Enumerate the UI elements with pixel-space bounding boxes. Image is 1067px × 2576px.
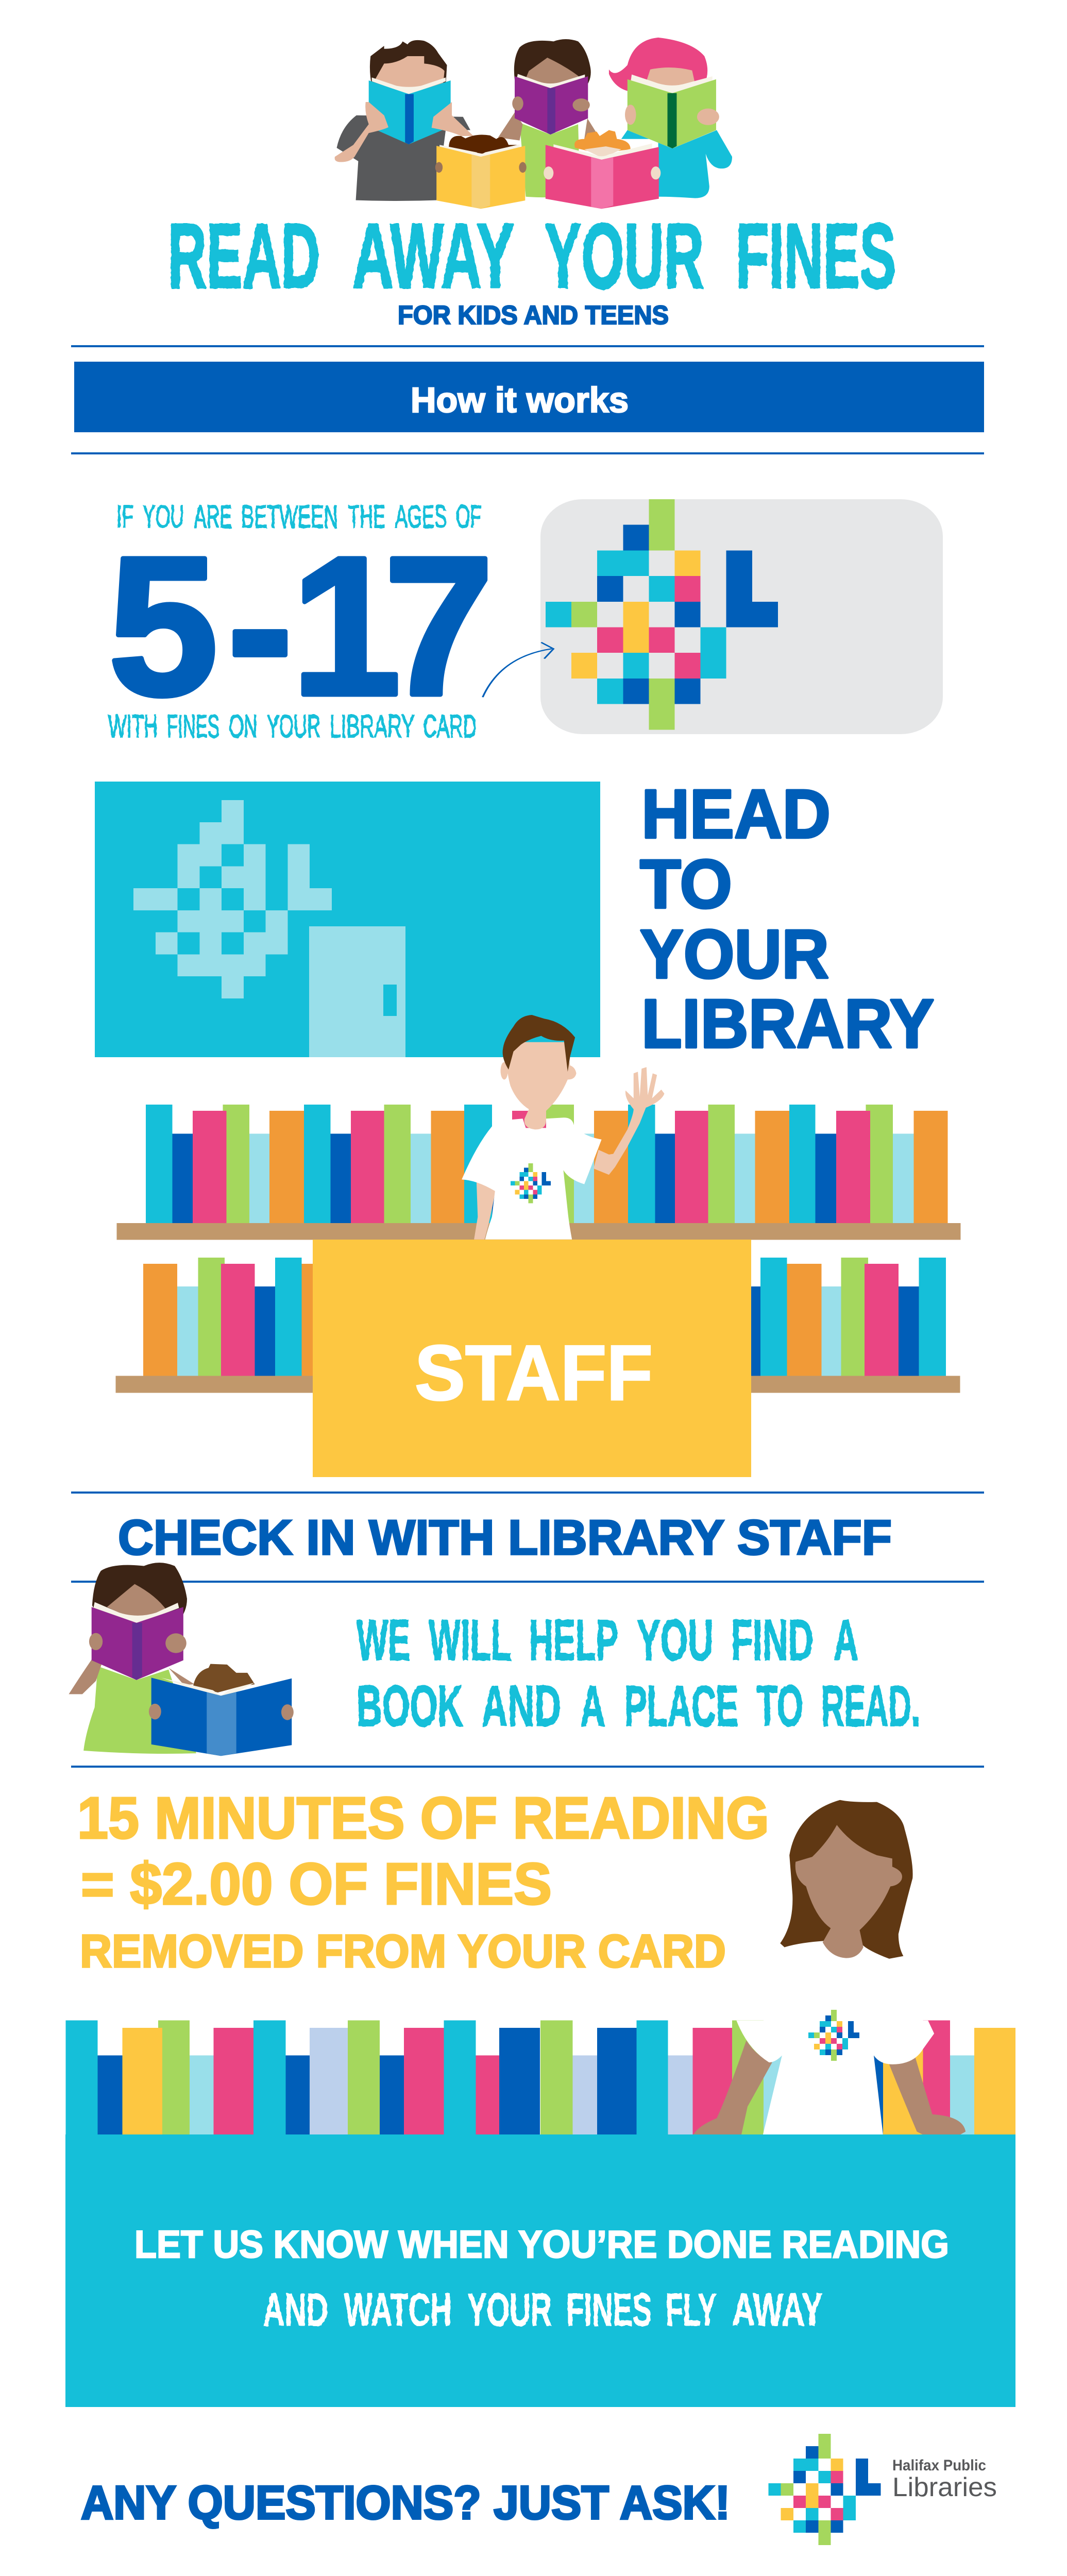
text: removed from card: REMOVED FROM YOUR CARD bbox=[80, 1926, 726, 1977]
cta line two: WATCH bbox=[344, 2284, 452, 2336]
kid: girl with pink hair and green book bbox=[609, 38, 732, 198]
cta line one: LET US KNOW WHEN YOU’RE DONE READING bbox=[134, 2223, 949, 2266]
footer question: ANY QUESTIONS? JUST ASK! bbox=[81, 2477, 730, 2529]
boy with blue book bbox=[149, 1664, 294, 1756]
heading: head to your library: HEAD bbox=[641, 776, 831, 853]
text: ages line: THE bbox=[348, 499, 385, 535]
big number 5-17 bbox=[108, 516, 494, 737]
text: we will help you: AND bbox=[481, 1674, 561, 1738]
rule top bbox=[71, 345, 984, 347]
text: we will help you: YOU bbox=[637, 1608, 714, 1672]
kid: girl with purple book bbox=[498, 39, 597, 197]
text: fines line: LIBRARY bbox=[330, 709, 415, 744]
text: ages line: OF bbox=[456, 499, 481, 535]
shelf one books bbox=[146, 1105, 947, 1223]
heading: head to your library: LIBRARY bbox=[641, 986, 934, 1062]
text: fines line: YOUR bbox=[267, 709, 320, 744]
text: two dollars: = $2.00 OF FINES bbox=[81, 1852, 552, 1917]
cta line two: FINES bbox=[566, 2284, 652, 2336]
staff torso bbox=[693, 2021, 966, 2134]
icon: logo on staff shirt bbox=[511, 1163, 551, 1204]
footer logo bbox=[769, 2434, 997, 2545]
text: we will help you: HELP bbox=[529, 1608, 618, 1672]
panel: library logo on grey bbox=[540, 499, 943, 734]
cta line two: YOUR bbox=[467, 2284, 552, 2336]
text: fines line: CARD bbox=[423, 709, 477, 744]
illustration: five kids reading bbox=[335, 38, 732, 209]
text: fines line: WITH bbox=[108, 709, 158, 744]
text: ages line: IF bbox=[116, 499, 133, 535]
text: ages line: AGES bbox=[395, 499, 447, 535]
text: fines line bbox=[108, 709, 477, 744]
big number 5-17: - bbox=[227, 516, 293, 737]
rule below check in bbox=[71, 1581, 984, 1583]
icon: door bbox=[309, 926, 405, 1057]
panel: library building bbox=[95, 782, 600, 1057]
title: READ bbox=[168, 205, 320, 307]
text: we will help you: A bbox=[580, 1674, 605, 1738]
girl with purple book bbox=[69, 1563, 196, 1754]
cta line two: AND bbox=[263, 2284, 328, 2336]
shelf two board bbox=[115, 1376, 960, 1393]
big number 5-17: 7 bbox=[384, 516, 494, 737]
bookshelves and staff bbox=[115, 1015, 961, 1393]
banner text: How it works bbox=[411, 380, 629, 420]
cta line two bbox=[263, 2284, 823, 2336]
kid: child with yellow book bbox=[435, 134, 527, 209]
banner: how it works bbox=[74, 362, 984, 432]
books row above panel bbox=[65, 2021, 1015, 2134]
panel: staff desk bbox=[313, 1240, 751, 1477]
heading: check in: CHECK IN WITH LIBRARY STAFF bbox=[118, 1510, 892, 1565]
icon: logo on shirt bbox=[808, 2010, 859, 2061]
text: fifteen minutes bbox=[77, 1786, 769, 1977]
text: we will help you: TO bbox=[757, 1674, 803, 1738]
title: FINES bbox=[736, 205, 896, 307]
rule below banner bbox=[71, 452, 984, 454]
heading: head to your library: TO bbox=[640, 846, 732, 923]
text: we will help you: FIND bbox=[731, 1608, 814, 1672]
icon: pale logo bbox=[133, 800, 332, 998]
big number 5-17: 5 bbox=[108, 516, 218, 737]
cta line two: AWAY bbox=[732, 2284, 823, 2336]
text: ages line: YOU bbox=[143, 499, 184, 535]
shelf two books bbox=[143, 1258, 946, 1376]
heading: head to your library bbox=[640, 776, 934, 1062]
logo wordmark: Libraries bbox=[892, 2472, 997, 2502]
logo wordmark: Halifax Public bbox=[892, 2457, 986, 2474]
title: AWAY bbox=[352, 205, 514, 307]
text: we will help you bbox=[357, 1608, 920, 1738]
illustration: girl and boy reading bbox=[69, 1563, 294, 1756]
text: fines line: ON bbox=[229, 709, 258, 744]
text: fines line: FINES bbox=[167, 709, 219, 744]
text: we will help you: BOOK bbox=[357, 1674, 463, 1738]
kid: child with pink book bbox=[544, 130, 660, 209]
text: ages line: ARE bbox=[194, 499, 232, 535]
subtitle: FOR KIDS AND TEENS bbox=[398, 300, 669, 330]
text: we will help you: READ. bbox=[821, 1674, 920, 1738]
staff person bbox=[462, 1015, 665, 1240]
desk label: STAFF bbox=[415, 1329, 653, 1417]
text: ages line bbox=[116, 499, 481, 535]
heading: head to your library: YOUR bbox=[640, 916, 829, 993]
illustration: head of reader bbox=[780, 1800, 913, 1959]
text: we will help you: PLACE bbox=[624, 1674, 738, 1738]
panel: call to action bbox=[65, 2134, 1015, 2407]
text: we will help you: WILL bbox=[429, 1608, 512, 1672]
kid: boy with cyan book bbox=[335, 40, 473, 201]
rule below help text bbox=[71, 1766, 984, 1768]
text: ages line: BETWEEN bbox=[241, 499, 338, 535]
logo wordmark bbox=[892, 2457, 997, 2502]
title bbox=[168, 205, 896, 307]
arrow: to logo bbox=[483, 642, 553, 697]
text: fifteen minutes: 15 MINUTES OF READING bbox=[77, 1786, 769, 1851]
text: we will help you: A bbox=[834, 1608, 858, 1672]
big number 5-17: 1 bbox=[291, 516, 401, 737]
rule above check in bbox=[71, 1492, 984, 1494]
title: YOUR bbox=[545, 205, 704, 307]
text: we will help you: WE bbox=[357, 1608, 410, 1672]
cta line two: FLY bbox=[666, 2284, 717, 2336]
shelf one board bbox=[117, 1223, 961, 1240]
